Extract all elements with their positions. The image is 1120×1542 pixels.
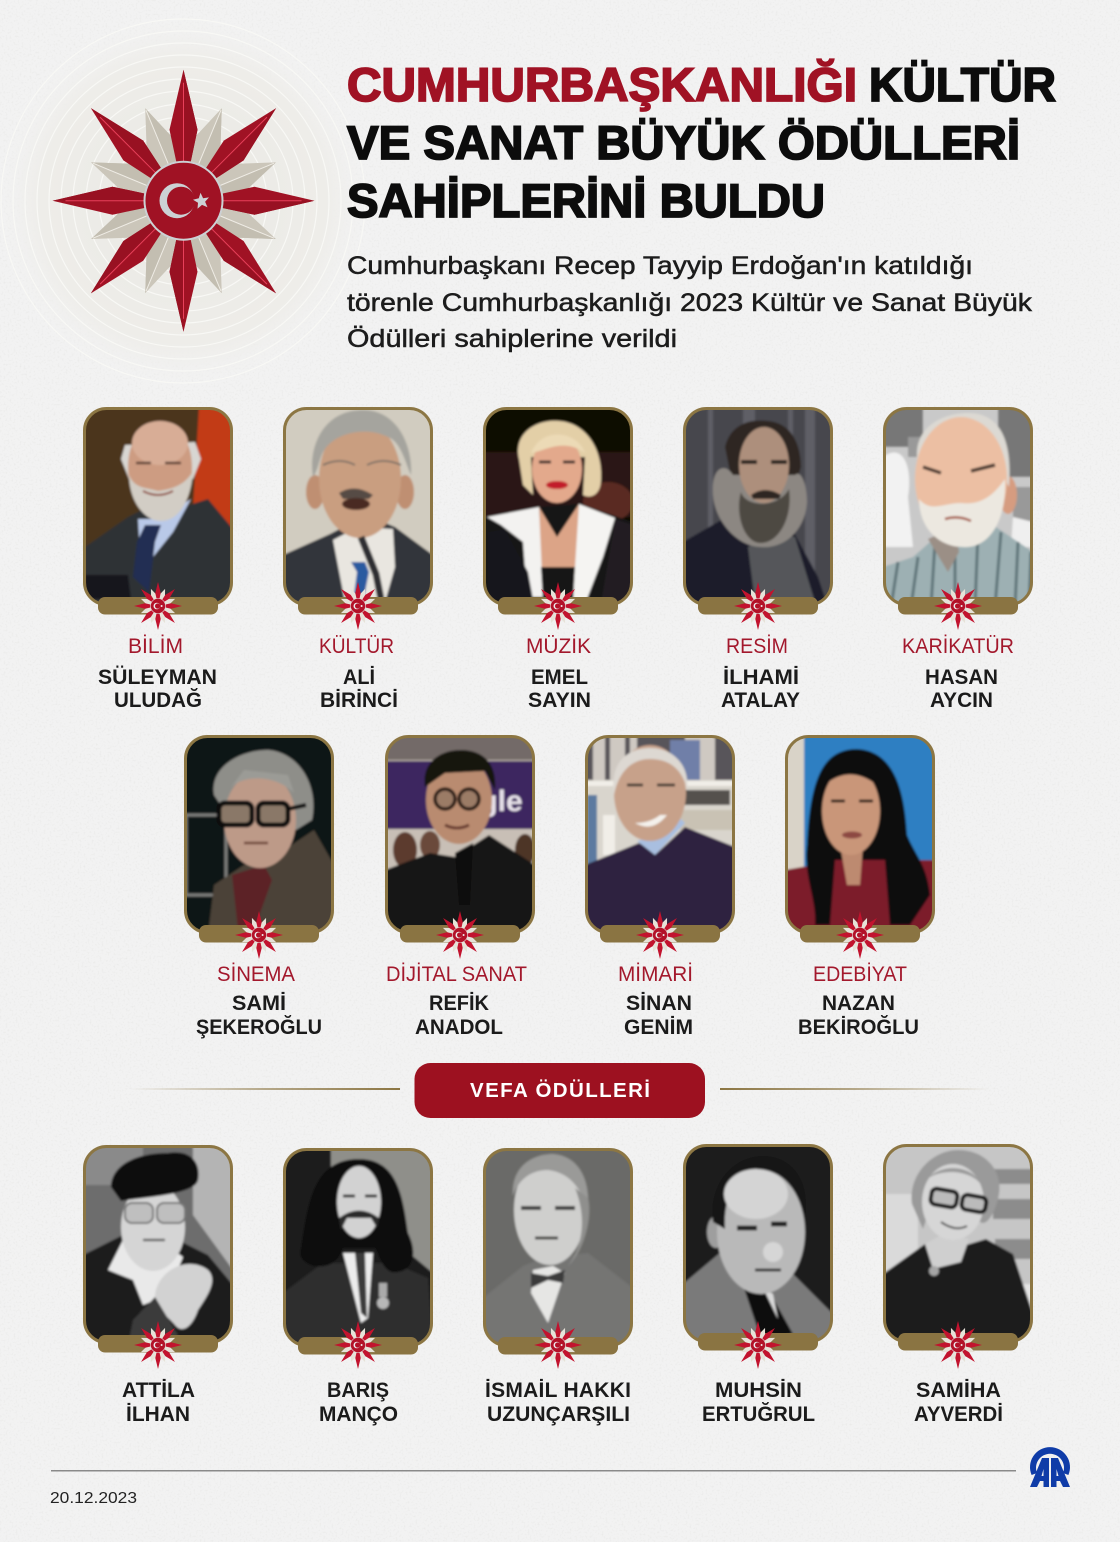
winner: Hasan Aycın: AYCIN <box>930 689 993 712</box>
winner: İlhami Atalay: RESİM <box>726 635 788 658</box>
honoree: Samiha Ayverdi: SAMİHA <box>916 1379 1001 1402</box>
honoree: Muhsin Ertuğrul: MUHSİN <box>715 1379 802 1402</box>
honoree: Muhsin Ertuğrul: ERTUĞRUL <box>702 1402 815 1426</box>
emblem: sun star with crescent <box>52 70 314 332</box>
winner: Refik Anadol: REFİK <box>429 992 489 1015</box>
subtitle: törenle Cumhurbaşkanlığı 2023 Kültür ve Sanat Büyük <box>347 289 1033 317</box>
winner: Emel Sayın: MÜZİK <box>526 635 591 658</box>
honoree: İsmail Hakkı Uzunçarşılı: UZUNÇARŞILI <box>487 1403 630 1426</box>
divider line right <box>720 1088 990 1090</box>
title: KÜLTÜR <box>869 58 1056 111</box>
winner: Süleyman Uludağ: ULUDAĞ <box>114 688 202 712</box>
winner: Sami Şekeroğlu: SİNEMA <box>217 963 295 986</box>
decorative rings behind emblem <box>0 11 373 391</box>
honoree: İsmail Hakkı Uzunçarşılı: İSMAİL HAKKI <box>485 1379 631 1402</box>
title: SAHİPLERİNİ BULDU <box>347 174 825 227</box>
honoree: İsmail Hakkı Uzunçarşılı <box>483 1148 633 1426</box>
winner: Ali Birinci: BİRİNCİ <box>320 689 398 712</box>
winner: Sinan Genim: MİMARİ <box>618 963 693 986</box>
winner: Sinan Genim: GENİM <box>624 1016 693 1039</box>
winner: Emel Sayın <box>483 407 633 712</box>
subtitle: Cumhurbaşkanı Recep Tayyip Erdoğan'ın katıldığı <box>347 252 973 280</box>
winner: Hasan Aycın: KARİKATÜR <box>902 635 1014 658</box>
honoree: Attila İlhan: İLHAN <box>126 1403 190 1426</box>
winner: Ali Birinci <box>283 407 433 712</box>
winner: Nazan Bekiroğlu: BEKİROĞLU <box>798 1015 919 1039</box>
honoree: Attila İlhan <box>83 1145 233 1426</box>
winner: Süleyman Uludağ: SÜLEYMAN <box>98 666 217 689</box>
winner: İlhami Atalay <box>683 407 833 712</box>
winner: Emel Sayın: EMEL <box>531 666 588 689</box>
honoree: Barış Manço <box>283 1148 433 1426</box>
winner: Nazan Bekiroğlu <box>785 735 935 1039</box>
winner: Ali Birinci: ALİ <box>343 666 375 689</box>
winner: Hasan Aycın: HASAN <box>925 666 998 689</box>
honoree: Attila İlhan: ATTİLA <box>122 1379 195 1402</box>
divider line left <box>130 1088 400 1090</box>
winner: Sami Şekeroğlu: ŞEKEROĞLU <box>196 1015 322 1039</box>
section badge: Vefa Ödülleri <box>414 1063 705 1118</box>
winner: Sami Şekeroğlu <box>184 735 334 1039</box>
honoree: Barış Manço: BARIŞ <box>327 1379 389 1402</box>
title <box>347 58 1056 227</box>
icon: AA logo <box>1030 1447 1070 1487</box>
winner: Ali Birinci: KÜLTÜR <box>319 635 394 658</box>
honoree: Muhsin Ertuğrul <box>683 1144 833 1426</box>
honoree: Samiha Ayverdi <box>883 1144 1033 1426</box>
winner: Süleyman Uludağ: BİLİM <box>128 635 183 658</box>
winner: Refik Anadol: DİJİTAL SANAT <box>386 963 527 986</box>
section badge: Vefa Ödülleri: VEFA ÖDÜLLERİ <box>470 1079 650 1102</box>
title: CUMHURBAŞKANLIĞI <box>347 58 857 111</box>
winner: İlhami Atalay: İLHAMİ <box>723 666 799 689</box>
winner: Nazan Bekiroğlu: EDEBİYAT <box>813 963 907 986</box>
winner: Sinan Genim <box>585 735 735 1039</box>
honoree: Barış Manço: MANÇO <box>319 1403 398 1426</box>
date: 20.12.2023 <box>50 1490 137 1507</box>
winner: Refik Anadol: gle <box>479 785 523 818</box>
winner: Refik Anadol <box>385 735 535 1039</box>
subtitle: Ödülleri sahiplerine verildi <box>347 325 677 353</box>
subtitle <box>347 252 1033 353</box>
honoree: Samiha Ayverdi: AYVERDİ <box>914 1403 1003 1426</box>
winner: Emel Sayın: SAYIN <box>528 689 591 712</box>
winner: Sinan Genim: SİNAN <box>626 992 692 1015</box>
winner: Nazan Bekiroğlu: NAZAN <box>822 992 895 1015</box>
winner: İlhami Atalay: ATALAY <box>721 689 800 712</box>
winner: Sami Şekeroğlu: SAMİ <box>232 992 286 1015</box>
winner: Refik Anadol: ANADOL <box>415 1016 503 1039</box>
title: VE SANAT BÜYÜK ÖDÜLLERİ <box>347 116 1020 169</box>
winner: Hasan Aycın <box>883 407 1033 712</box>
footer rule <box>51 1470 1016 1472</box>
winner: Süleyman Uludağ <box>83 407 233 712</box>
